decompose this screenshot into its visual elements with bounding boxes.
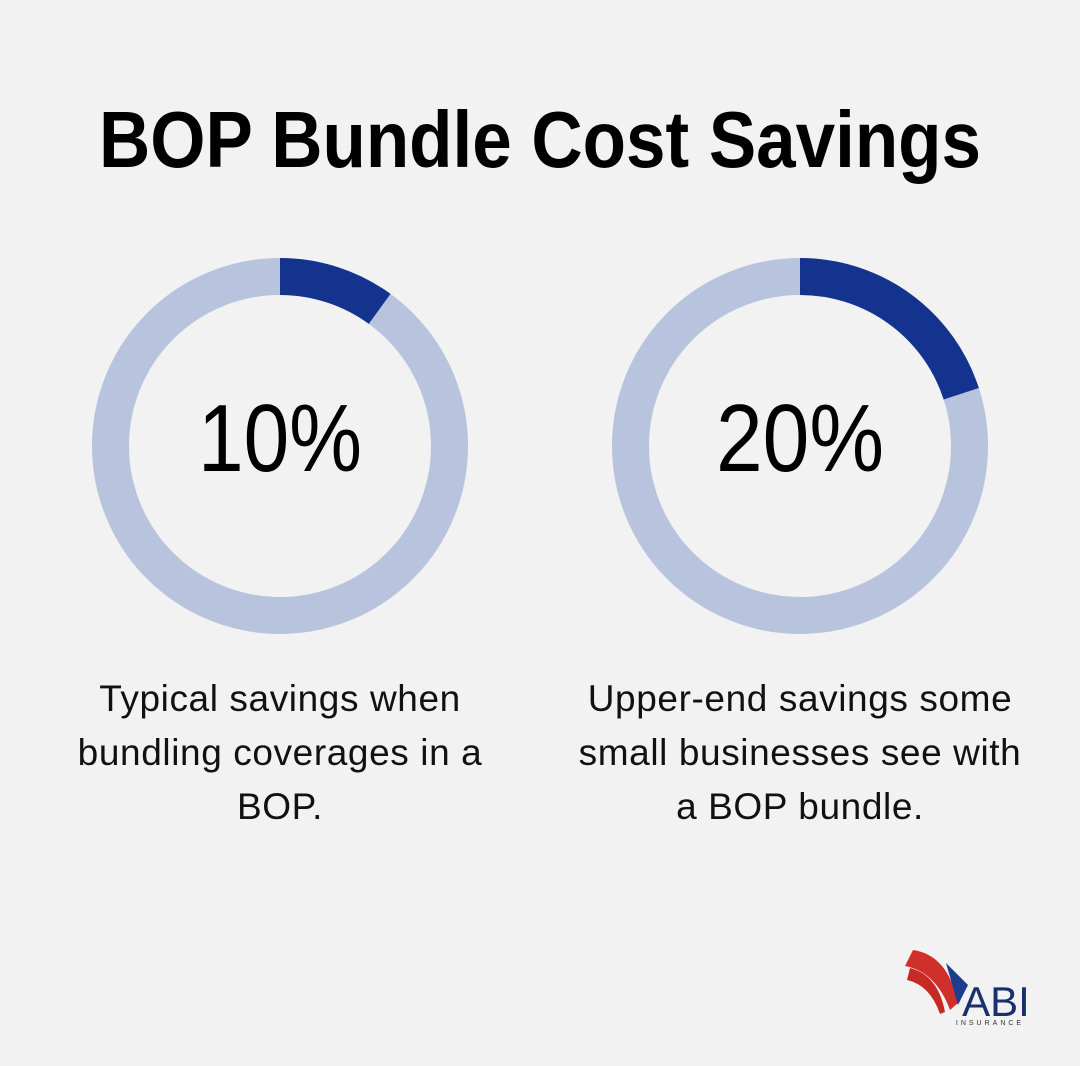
- caption: 10%: [78, 678, 482, 827]
- caption: 10%: Typical savings when: [99, 678, 461, 719]
- caption: 20%: [579, 678, 1021, 827]
- donut: 10%: [110, 276, 450, 616]
- caption: 10%: bundling coverages in a: [78, 732, 482, 773]
- caption: 10%: BOP.: [237, 786, 323, 827]
- caption: 20%: Upper-end savings some: [588, 678, 1012, 719]
- donut: 10%: 10%: [198, 385, 362, 492]
- caption: 20%: a BOP bundle.: [676, 786, 924, 827]
- title: BOP Bundle Cost Savings: [99, 95, 981, 184]
- donut: 20%: [630, 276, 970, 616]
- logo: ABI Insurance: [905, 950, 1030, 1027]
- caption: 20%: small businesses see with: [579, 732, 1021, 773]
- donut: 20%: 20%: [716, 385, 884, 492]
- logo: ABI Insurance: INSURANCE: [956, 1020, 1024, 1027]
- logo: ABI Insurance: ABI: [962, 978, 1030, 1025]
